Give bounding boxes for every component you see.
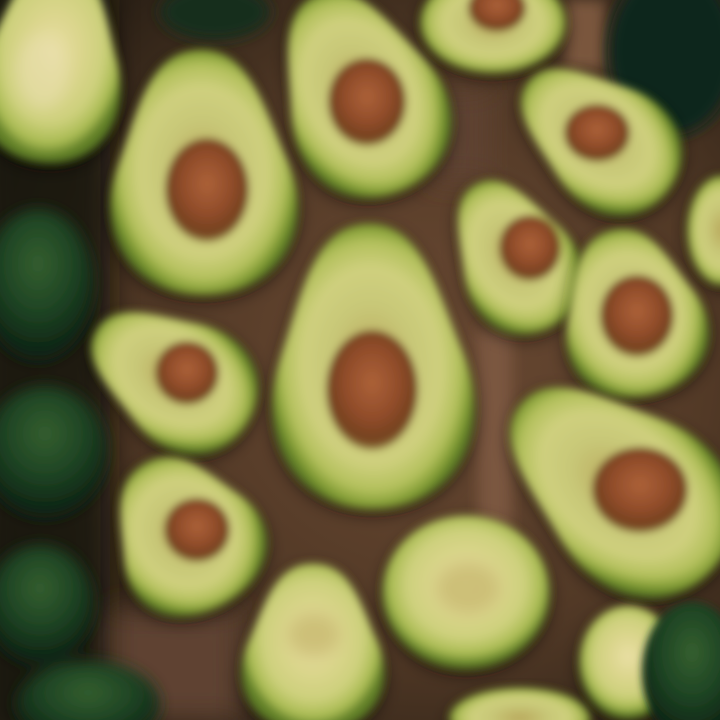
avocado half: lower left bbox=[82, 427, 288, 639]
avocado half: top edge bbox=[421, 0, 565, 72]
avocado half: lower right large bbox=[466, 338, 720, 632]
avocado half: top left bbox=[0, 0, 133, 169]
avocado half: right middle bbox=[543, 213, 720, 411]
avocado half: right edge partial bbox=[688, 176, 720, 284]
avocado half: right middle small bbox=[426, 157, 602, 353]
avocado half: bottom right partial bbox=[580, 606, 676, 718]
avocado half: bottom centre, pit removed bbox=[383, 516, 549, 668]
avocado half: upper right bbox=[491, 33, 705, 239]
dark whole avocado: bottom right bbox=[642, 602, 720, 720]
avocado half: bottom edge bbox=[450, 688, 590, 720]
dark whole avocados, top bbox=[160, 0, 720, 136]
avocado half: bottom, pit removed bbox=[242, 564, 384, 720]
avocado half: left middle bbox=[64, 276, 280, 476]
avocado half: upper left large bbox=[106, 47, 300, 297]
avocado half: top centre bbox=[246, 0, 474, 221]
avocado half: centre large bbox=[267, 221, 477, 511]
dark whole avocados, left side bbox=[0, 209, 160, 720]
